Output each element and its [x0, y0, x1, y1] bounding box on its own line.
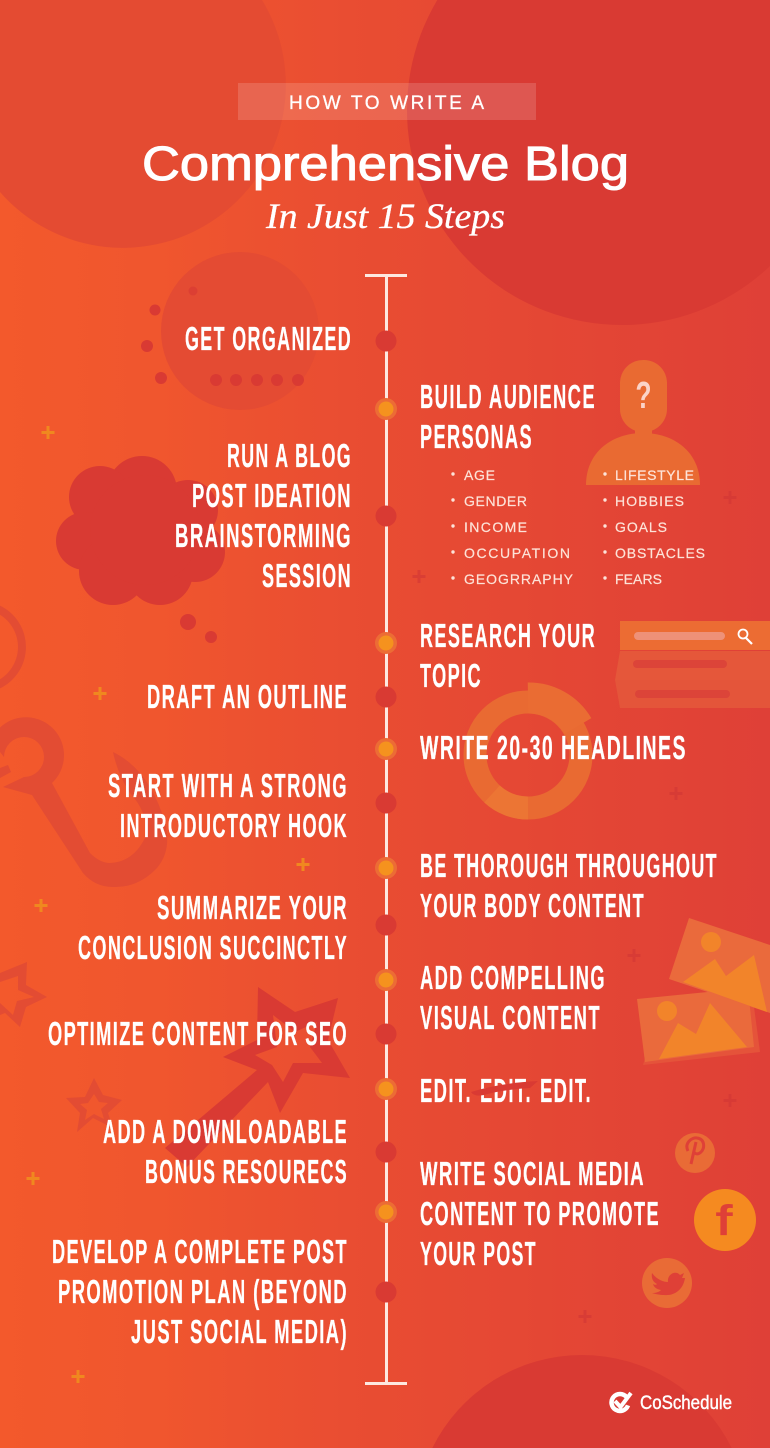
step: edit edit edit [420, 1072, 592, 1109]
persona attribute list: LIFESTYLE [615, 467, 694, 483]
step: edit edit edit: EDIT. [480, 1072, 532, 1109]
timeline nodes: orange [375, 398, 397, 1223]
persona attribute list: GEOGRRAPHY [464, 571, 574, 587]
step: body content [420, 847, 718, 924]
illustration: brainstorm cloud [56, 456, 225, 643]
main title: Comprehensive Blog [142, 138, 629, 191]
title block [142, 83, 629, 236]
timeline nodes: red [376, 330, 396, 1302]
step: promotion plan: PROMOTION PLAN (BEYOND [58, 1273, 348, 1310]
step: promotion plan: DEVELOP A COMPLETE POST [52, 1233, 348, 1270]
step: run a blog post ideation brainstorming session: SESSION [262, 557, 352, 594]
persona attribute list: AGE [464, 467, 495, 483]
illustration: social icons [642, 1133, 756, 1308]
icon: twitter [642, 1258, 692, 1308]
small plus decorations [26, 426, 736, 1383]
illustration: organizer circle with dots [141, 252, 319, 410]
step: conclusion [78, 889, 348, 966]
step: run a blog post ideation brainstorming session: BRAINSTORMING [175, 517, 352, 554]
illustration: search box [615, 621, 770, 708]
step: introductory hook: INTRODUCTORY HOOK [120, 807, 348, 844]
persona attribute list: OCCUPATION [464, 545, 570, 561]
persona attribute list: FEARS [615, 571, 662, 587]
kicker banner [238, 83, 536, 120]
icon: pinterest [675, 1133, 715, 1173]
steps: right column [420, 378, 718, 1272]
step: promotion plan: JUST SOCIAL MEDIA) [131, 1313, 348, 1350]
step: social media [420, 1155, 660, 1272]
logo: CoSchedule: CoSchedule [640, 1393, 732, 1414]
illustration: picture cards [637, 918, 770, 1065]
step: build audience personas: BUILD AUDIENCE [420, 378, 596, 415]
step: downloadable bonus: ADD A DOWNLOADABLE [103, 1113, 348, 1150]
step: social media: YOUR POST [420, 1235, 537, 1272]
step: run a blog post ideation brainstorming session: RUN A BLOG [227, 437, 352, 474]
persona attribute list: HOBBIES [615, 493, 684, 509]
step: introductory hook [108, 767, 348, 844]
step: introductory hook: START WITH A STRONG [108, 767, 348, 804]
illustration: stars and arrow [0, 962, 350, 1167]
steps: left column [48, 320, 352, 1350]
step: visual content [420, 959, 606, 1036]
illustration: hook [0, 717, 167, 887]
step: build audience personas [420, 378, 596, 455]
step: visual content: ADD COMPELLING [420, 959, 606, 996]
step: get organized: GET ORGANIZED [185, 320, 352, 357]
icon: facebook [694, 1189, 756, 1251]
persona attribute list: OBSTACLES [615, 545, 705, 561]
step: run a blog post ideation brainstorming session: POST IDEATION [192, 477, 352, 514]
step: research your topic: RESEARCH YOUR [420, 617, 596, 654]
illustration: donut chart [475, 698, 581, 808]
illustration: audience persona silhouette: ? [636, 375, 652, 417]
kicker banner: HOW TO WRITE A [289, 93, 484, 114]
persona attribute list: INCOME [464, 519, 527, 535]
step: conclusion: CONCLUSION SUCCINCTLY [78, 929, 348, 966]
persona attribute list [451, 467, 705, 587]
step: build audience personas: PERSONAS [420, 418, 533, 455]
step: downloadable bonus [103, 1113, 348, 1190]
subtitle: In Just 15 Steps [265, 196, 505, 236]
step: research your topic: TOPIC [420, 657, 482, 694]
step: promotion plan [52, 1233, 348, 1350]
timeline spine [365, 274, 407, 1385]
persona attribute list: GENDER [464, 493, 527, 509]
step: visual content: VISUAL CONTENT [420, 999, 601, 1036]
step: draft an outline: DRAFT AN OUTLINE [147, 678, 348, 715]
step: conclusion: SUMMARIZE YOUR [157, 889, 348, 926]
illustration: ring at left edge [0, 606, 26, 688]
persona attribute list: GOALS [615, 519, 667, 535]
icon: facebook: f [716, 1197, 732, 1244]
logo: CoSchedule [612, 1393, 732, 1414]
step: optimize for seo: OPTIMIZE CONTENT FOR SEO [48, 1015, 348, 1052]
step: downloadable bonus: BONUS RESOURECS [145, 1153, 348, 1190]
step: edit edit edit: EDIT. [420, 1072, 472, 1109]
illustration: audience persona silhouette [586, 360, 700, 485]
step: research your topic [420, 617, 596, 694]
step: edit edit edit: EDIT. [540, 1072, 592, 1109]
step: run a blog post ideation brainstorming session [175, 437, 352, 594]
